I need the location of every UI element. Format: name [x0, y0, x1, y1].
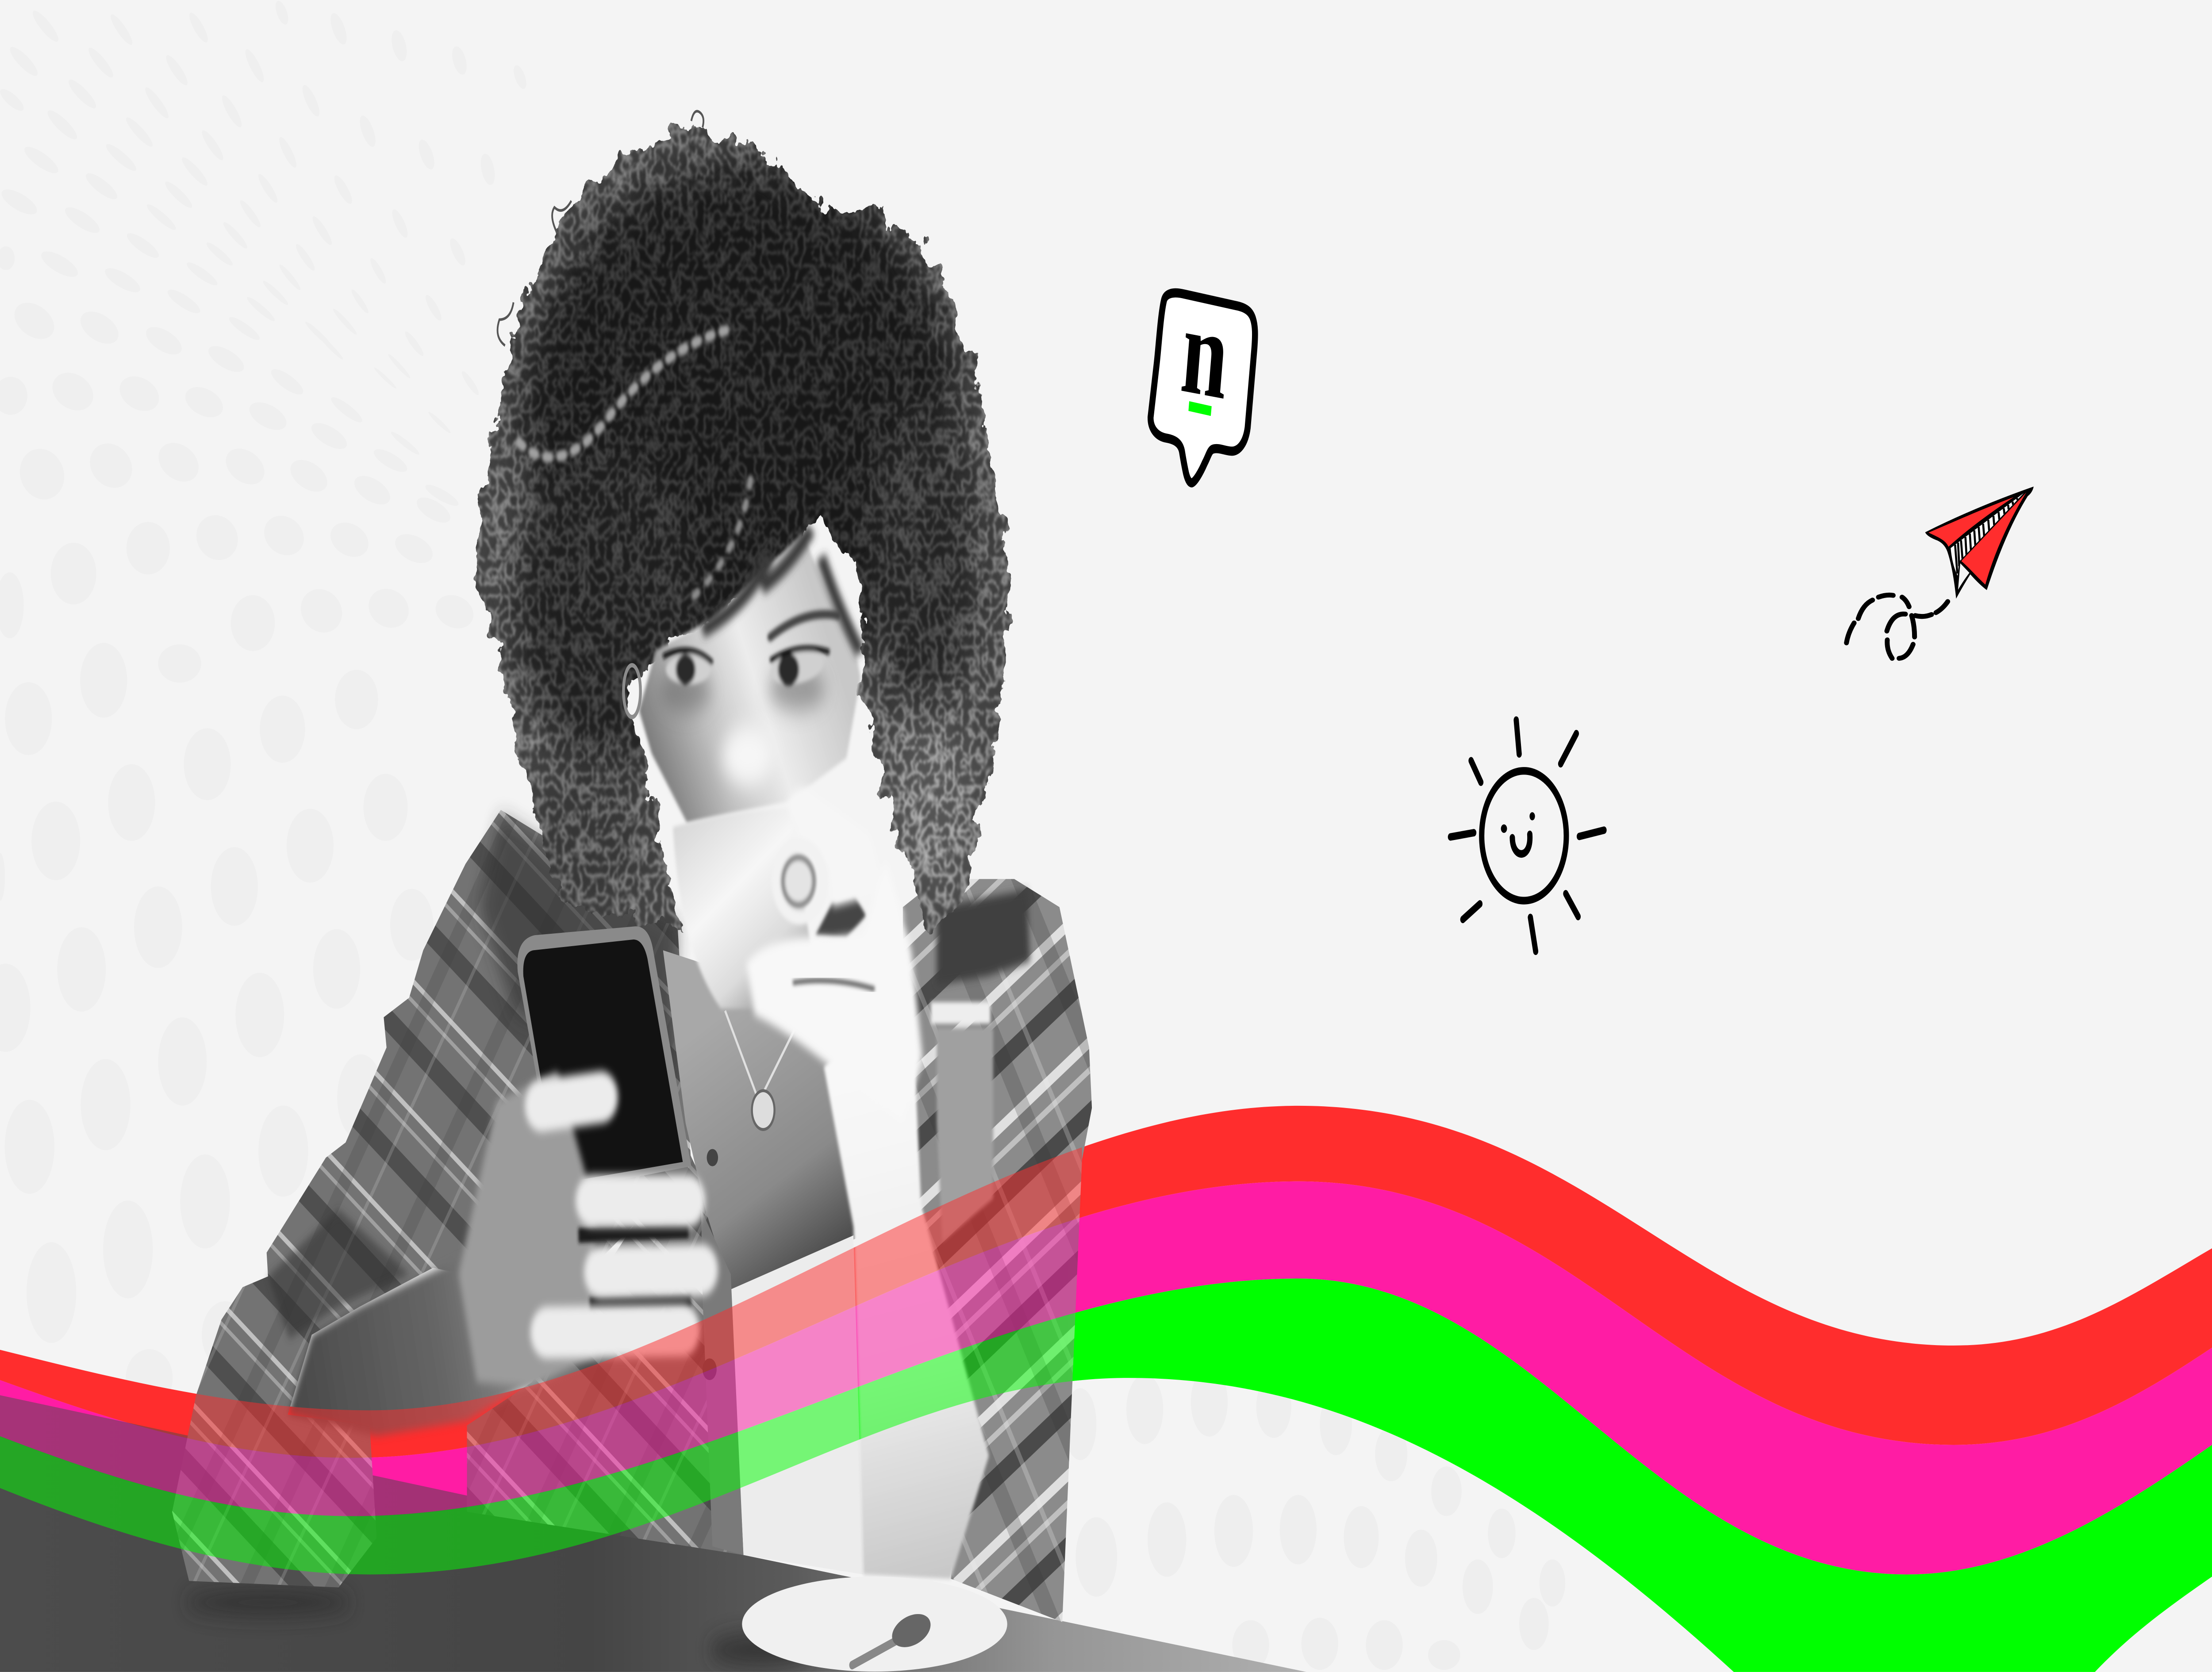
fringe curls [703, 529, 860, 652]
earring [623, 665, 641, 717]
plane outline [1925, 487, 2034, 598]
holding hand [288, 1071, 701, 1436]
icon: dashed flight trail [1847, 595, 1948, 658]
eyes and brows [663, 614, 838, 689]
icon: sun [1451, 720, 1604, 951]
chest [663, 950, 864, 1292]
tail triangle [1958, 563, 1970, 590]
icon: paper plane [1925, 487, 2034, 598]
right shoulder dark patch [937, 890, 1030, 985]
right shirt panel [937, 1028, 993, 1242]
tank top [731, 1235, 864, 1574]
right shirt light stripe [931, 1002, 991, 1024]
spoon [852, 1608, 933, 1665]
mug [673, 808, 811, 1009]
upper hand [787, 788, 906, 918]
eye shadows [660, 667, 825, 713]
ribbon waves [0, 1106, 2212, 1672]
right forearm [824, 989, 989, 1579]
dot pattern: upper left [0, 0, 529, 651]
left sleeve [172, 810, 691, 1588]
top wing [1928, 497, 2014, 547]
fold band [1951, 493, 2024, 576]
right sleeve [903, 879, 1092, 1622]
shirt front [467, 1145, 743, 1555]
table [0, 1395, 1306, 1672]
person [172, 86, 1092, 1622]
finger gaps [578, 1231, 691, 1304]
dot pattern: bottom centre [1064, 1367, 1565, 1670]
hair highlights [519, 328, 750, 596]
back of hand [458, 1071, 595, 1387]
finger shadow [793, 981, 875, 989]
dot pattern: lower left [0, 643, 434, 1407]
shoulder shadow [480, 817, 677, 1080]
table shadows [184, 1590, 815, 1667]
buttons [703, 1149, 718, 1380]
translucent ribbon over photo [0, 1106, 2212, 1672]
forearm [288, 1209, 565, 1436]
mug handle [776, 844, 824, 918]
face [639, 533, 860, 823]
phone [517, 926, 691, 1192]
hair [473, 123, 1013, 935]
nose highlight [722, 726, 773, 786]
sleeve elbow shadow [268, 1209, 409, 1339]
necklace [725, 1011, 794, 1130]
shirt placket [701, 1209, 743, 1555]
dark gap in hand [815, 896, 866, 937]
lower hand [746, 859, 922, 1123]
lower wing [1961, 492, 2026, 585]
logo bubble [1151, 280, 1255, 483]
stray curls [498, 111, 703, 345]
fold hatching [1955, 498, 2017, 574]
saucer [742, 1576, 1007, 1672]
logo bubble: n [1177, 280, 1233, 426]
fingers [541, 1097, 701, 1333]
